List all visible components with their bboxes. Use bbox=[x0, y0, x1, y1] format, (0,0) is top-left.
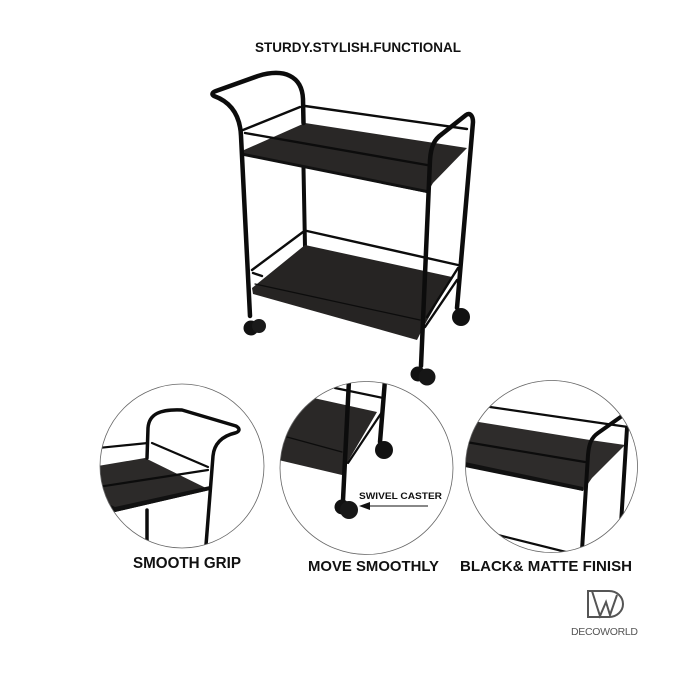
label: black and matte finish: BLACK& MATTE FINISH bbox=[460, 558, 632, 575]
top rails bbox=[243, 106, 467, 165]
wheels bbox=[244, 308, 470, 386]
right frame bbox=[421, 114, 473, 366]
label: move smoothly: MOVE SMOOTHLY bbox=[308, 558, 439, 575]
back post bbox=[304, 168, 305, 247]
bottom rails bbox=[252, 231, 458, 327]
bottom shelf bbox=[252, 245, 452, 340]
arrow bbox=[359, 502, 428, 510]
logo mark bbox=[588, 591, 623, 617]
logo wordmark: DECOWORLD bbox=[571, 626, 638, 638]
callout: swivel caster bbox=[359, 491, 442, 510]
handle and left post bbox=[213, 73, 304, 316]
product: bar cart bbox=[213, 73, 473, 386]
title: STURDY.STYLISH.FUNCTIONAL bbox=[255, 39, 461, 55]
circle: smooth grip bbox=[98, 384, 264, 548]
label: smooth grip: SMOOTH GRIP bbox=[133, 555, 241, 572]
callout: swivel caster: SWIVEL CASTER bbox=[359, 491, 442, 502]
top shelf bbox=[244, 123, 467, 193]
circle: move smoothly bbox=[270, 380, 453, 554]
circle: black and matte finish bbox=[460, 380, 638, 553]
logo: decoworld bbox=[571, 591, 638, 638]
